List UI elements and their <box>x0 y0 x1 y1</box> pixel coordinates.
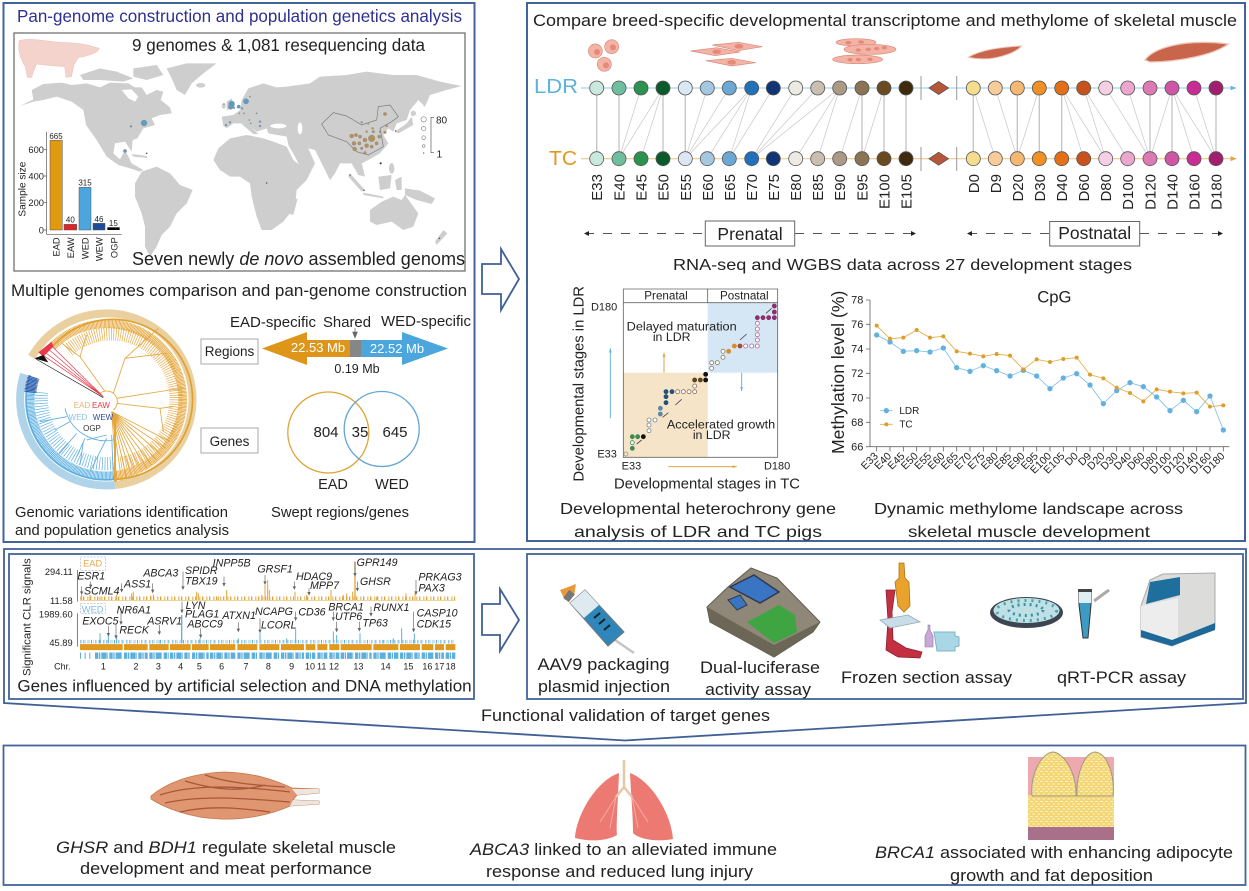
adipose conclusion: BRCA1 associated with enhancing adipocyte <box>875 844 1233 862</box>
arrow: to validation <box>482 589 519 651</box>
icon: myoblast cells <box>588 39 896 71</box>
subheading: multiple genomes: Multiple genomes comparison and pan-genome construction <box>11 282 467 300</box>
gene pointer arrows <box>80 562 418 639</box>
stage correspondence lines <box>597 88 1216 159</box>
heterochrony chart: Accelerated growth <box>667 417 775 431</box>
track axes: Significant CLR signals <box>22 558 34 676</box>
stage labels: E95 <box>854 174 872 201</box>
tree group labels: EAD <box>74 401 90 410</box>
stage labels: D120 <box>1142 174 1160 210</box>
track axes: 11.58 <box>50 596 73 606</box>
icon: petri dish <box>990 597 1063 628</box>
methylation line chart: E65 <box>939 450 961 472</box>
stage labels: D30 <box>1032 174 1049 202</box>
methylation line chart: 66 <box>851 441 863 453</box>
methylation line chart: E80 <box>979 450 1001 472</box>
methylation line chart: E75 <box>966 450 987 472</box>
China outline <box>322 105 398 155</box>
heterochrony chart: Developmental stages in TC <box>614 476 800 492</box>
arrow: to transcriptome <box>482 249 519 310</box>
heterochrony chart: D180 <box>764 460 790 472</box>
stage labels: E40 <box>612 174 628 201</box>
gene labels: RUNX1 <box>373 602 410 614</box>
icon: muscle tissue <box>968 42 1228 62</box>
methylation line chart: D9 <box>1076 450 1094 468</box>
heterochrony chart: Prenatal <box>644 289 688 302</box>
stage labels: D0 <box>966 174 983 193</box>
gene labels: HDAC9 <box>296 571 332 583</box>
regions labels: EAD-specific <box>230 315 316 331</box>
stage labels: D60 <box>1076 174 1093 202</box>
sample size bar chart: WED <box>80 237 90 259</box>
track axes: 1989.60 <box>39 609 73 619</box>
methylation line chart: E40 <box>872 450 894 472</box>
gene labels: INPP5B <box>213 558 251 570</box>
stage labels: E60 <box>700 174 717 201</box>
muscle conclusion: development and meat performance <box>80 860 372 878</box>
panel heading: pan-genome: Pan-genome construction and population genetics analysis <box>17 6 462 26</box>
stage labels: E70 <box>744 174 761 201</box>
stage labels: E50 <box>656 174 672 201</box>
track axes <box>22 557 105 676</box>
stage labels: D180 <box>1208 174 1226 210</box>
venn diagram: EAD <box>318 477 348 493</box>
tree group labels <box>69 401 114 433</box>
chart legend <box>880 406 919 431</box>
methylation line chart: CpG <box>1037 288 1071 307</box>
sample size bar chart: EAW <box>66 237 76 258</box>
tree caption <box>15 505 229 539</box>
genes box <box>201 428 258 453</box>
chromosome labels: 16 <box>422 661 432 671</box>
tree group labels: OGP <box>83 424 101 433</box>
sample size bar chart: 315 <box>78 178 92 187</box>
sample size bar chart: 46 <box>95 215 104 224</box>
lung conclusion <box>469 841 777 881</box>
gene labels: ASRV1 <box>146 615 182 627</box>
tree caption: and population genetics analysis <box>15 523 229 539</box>
gene labels: CD36 <box>298 607 326 619</box>
gene labels: EXOC5 <box>82 615 119 627</box>
phylogenetic tree <box>20 313 193 485</box>
chromosome labels: 13 <box>353 661 363 671</box>
muscle conclusion: GHSR and BDH1 regulate skeletal muscle <box>56 839 396 857</box>
gene labels: SCML4 <box>84 585 120 597</box>
sample size bar chart: 665 <box>49 132 63 141</box>
methylation line chart: D160 <box>1188 450 1214 477</box>
gene labels: CASP10 <box>417 607 458 619</box>
panel heading: transcriptome: Compare breed-specific developmental transcriptome and methylome of skeletal muscle <box>533 12 1237 30</box>
gene labels: GHSR <box>360 576 391 588</box>
chromosome labels: Chr. <box>54 661 71 671</box>
panel: conclusions <box>4 746 1246 885</box>
heterochrony caption <box>560 501 836 541</box>
heterochrony chart: in LDR <box>653 330 691 344</box>
stage labels: E105 <box>898 174 916 209</box>
sample size bar chart: 40 <box>66 216 75 225</box>
methylation line chart: D0 <box>1063 450 1081 468</box>
tree group labels: WEW <box>93 413 114 422</box>
methylation line chart: D80 <box>1138 450 1161 473</box>
methylation line chart: D40 <box>1112 450 1134 473</box>
gene labels: PLAG1 <box>185 609 219 621</box>
gene labels: NR6A1 <box>117 604 151 616</box>
gene labels: ABCC9 <box>186 619 223 631</box>
sample size bar chart: 200 <box>28 198 44 208</box>
stage labels: D40 <box>1054 174 1071 202</box>
muscle conclusion <box>56 839 396 878</box>
methylation line chart: D100 <box>1148 450 1174 477</box>
regions labels <box>230 314 471 331</box>
regions labels: Shared <box>323 315 371 331</box>
regions arrows: 22.53 Mb <box>291 340 345 355</box>
venn diagram: WED <box>375 477 409 493</box>
chromosome labels: 18 <box>446 661 456 671</box>
gene labels: PAX3 <box>418 583 445 595</box>
track axes: 45.89 <box>49 638 73 648</box>
adipose conclusion <box>875 844 1233 885</box>
point size legend: 80 <box>436 115 448 126</box>
gene labels <box>77 557 462 636</box>
venn diagram: 804 <box>313 424 339 441</box>
heterochrony caption: analysis of LDR and TC pigs <box>574 524 822 541</box>
stage labels: E45 <box>634 174 650 201</box>
swept regions diagram <box>201 314 471 521</box>
track axes: 294.11 <box>45 567 73 577</box>
methylation line chart: E50 <box>899 450 921 472</box>
methylation line chart: E45 <box>886 450 908 472</box>
icon: adipose tissue <box>1028 752 1114 840</box>
gene labels: GRSF1 <box>257 563 293 575</box>
timeline axes <box>581 76 1236 171</box>
point size legend <box>421 115 448 161</box>
gene labels: PRKAG3 <box>418 572 462 584</box>
LDR stage circles <box>590 81 1223 95</box>
chart legend: TC <box>899 420 913 431</box>
assay labels: Dual-luciferase <box>700 659 820 677</box>
methylation line chart: 68 <box>851 417 863 429</box>
heterochrony chart: Delayed maturation <box>627 320 737 334</box>
gene labels: CDK15 <box>417 619 451 631</box>
methylome caption <box>874 501 1183 541</box>
chromosome labels: 1 <box>101 661 106 671</box>
swept caption: Swept regions/genes <box>271 505 409 521</box>
chromosome labels: 8 <box>266 661 271 671</box>
gene labels: NCAPG <box>255 606 293 618</box>
panel: genes under selection <box>9 554 474 699</box>
gene labels: TP63 <box>362 617 388 629</box>
venn diagram <box>288 392 419 493</box>
sample size bar chart: Sample size <box>18 162 29 217</box>
methylation line chart: D20 <box>1085 450 1107 473</box>
methylation line chart: E100 <box>1028 450 1054 476</box>
stage labels: E100 <box>876 174 894 209</box>
lung conclusion: ABCA3 linked to an alleviated immune <box>469 841 777 859</box>
methylation line chart: D140 <box>1174 450 1201 477</box>
chart legend: LDR <box>899 406 919 417</box>
point size legend: 1 <box>437 150 443 161</box>
venn diagram: 645 <box>382 424 408 441</box>
stage labels: D20 <box>1010 174 1027 202</box>
gene labels: TBX19 <box>185 575 218 587</box>
map box <box>14 33 465 271</box>
icon: qPCR machine <box>1141 573 1215 646</box>
gene labels: ABCA3 <box>142 568 178 580</box>
gene labels: ASS1 <box>123 578 151 590</box>
icon: PCR tube <box>1078 589 1109 638</box>
venn diagram: 35 <box>352 424 368 441</box>
staircase points <box>624 304 776 456</box>
chromosome labels: 12 <box>329 661 339 671</box>
heterochrony chart: D180 <box>591 302 617 314</box>
gene labels: ESR1 <box>77 570 105 582</box>
methylation line chart: Methylation level (%) <box>828 291 848 454</box>
map title: 9 genomes & 1,081 resequencing data <box>132 35 425 55</box>
heterochrony caption: Developmental heterochrony gene <box>560 501 836 518</box>
track axes: WED <box>82 604 104 614</box>
sample size bar chart: EAD <box>51 237 61 257</box>
methylation line chart: D120 <box>1161 450 1187 477</box>
methylation line chart: E60 <box>926 450 947 472</box>
regions arrows: 0.19 Mb <box>334 362 380 376</box>
chromosome labels: 2 <box>133 661 138 671</box>
LDR row label: LDR <box>534 76 578 98</box>
sample size bar chart: WEW <box>95 237 105 261</box>
validation chevron frame <box>4 549 1246 740</box>
assay labels: plasmid injection <box>538 678 670 696</box>
regions box <box>201 339 258 364</box>
chromosome labels: 17 <box>434 661 444 671</box>
TC row label: TC <box>549 148 577 170</box>
gene labels: MPP7 <box>310 580 340 592</box>
gene labels: LYN <box>186 600 206 612</box>
chromosome labels: 6 <box>219 661 224 671</box>
chromosome labels: 9 <box>289 661 294 671</box>
methylation line chart: 72 <box>851 368 863 380</box>
sample size bar chart: 15 <box>109 219 118 228</box>
methylation line chart: E105 <box>1041 450 1068 476</box>
stage labels: E65 <box>722 174 739 201</box>
heterochrony chart <box>571 286 800 492</box>
heterochrony chart: in LDR <box>693 428 731 442</box>
methylation line chart <box>828 288 1229 477</box>
chromosome labels: 14 <box>381 661 391 671</box>
methylation line chart: E95 <box>1019 450 1041 472</box>
assay labels <box>538 656 1187 699</box>
methylation line chart: 76 <box>851 319 863 331</box>
gene labels: ATXN1 <box>221 610 256 622</box>
stage labels: E90 <box>832 174 849 201</box>
icon: syringe <box>560 584 634 653</box>
stage labels: E80 <box>788 174 805 201</box>
chromosome labels: 3 <box>156 661 161 671</box>
methylome caption: Dynamic methylome landscape across <box>874 501 1183 518</box>
stage labels: E33 <box>589 174 606 201</box>
gene labels: RECK <box>119 624 150 636</box>
panel: pan-genome construction <box>4 3 474 542</box>
stage labels: D9 <box>988 174 1005 193</box>
stage labels: E85 <box>810 174 827 201</box>
postnatal range: Postnatal <box>1058 223 1131 243</box>
stage labels <box>589 174 1226 210</box>
methylation line chart: E33 <box>859 450 881 472</box>
prenatal range <box>584 221 916 246</box>
tree group labels: EAW <box>92 401 110 410</box>
icon: microscope <box>880 563 959 658</box>
icon: muscle <box>151 772 319 819</box>
sample size bar chart: OGP <box>109 237 119 258</box>
methylation line chart: E70 <box>952 450 974 472</box>
selection signal tracks <box>80 562 455 656</box>
chromosome labels: 11 <box>317 661 326 671</box>
icon: luminometer <box>707 568 820 657</box>
chromosome labels: 7 <box>243 661 248 671</box>
tree group labels: WED <box>69 413 88 422</box>
regions box: Regions <box>205 344 255 359</box>
regions arrows <box>262 328 448 376</box>
assay labels: activity assay <box>705 681 812 699</box>
heterochrony chart: E33 <box>597 449 617 461</box>
validation heading: Functional validation of target genes <box>481 707 770 725</box>
gene labels: GPR149 <box>357 557 398 569</box>
methylation line chart: 78 <box>851 295 863 307</box>
assay labels: Frozen section assay <box>841 669 1013 687</box>
adipose conclusion: growth and fat deposition <box>950 867 1153 885</box>
gene labels: SPIDR <box>185 565 218 577</box>
panel: functional assays <box>527 554 1243 699</box>
sample size bar chart: 0 <box>39 225 44 235</box>
sample size bar chart: 400 <box>28 171 44 181</box>
stage labels: D80 <box>1098 174 1115 202</box>
methylation line chart: E85 <box>992 450 1014 472</box>
methylation line chart: E90 <box>1006 450 1027 472</box>
methylome caption: skeletal muscle development <box>908 524 1151 541</box>
panel: developmental transcriptome <box>527 3 1245 541</box>
chromosome labels: 4 <box>178 661 183 671</box>
heterochrony chart: E33 <box>622 460 641 472</box>
sample size bar chart <box>18 132 122 261</box>
TC stage circles <box>590 152 1223 166</box>
lung conclusion: response and reduced lung injury <box>486 863 754 881</box>
icon: lungs <box>575 760 673 840</box>
regions arrows: 22.52 Mb <box>370 341 424 356</box>
methylation line chart: D30 <box>1098 450 1121 473</box>
gene labels: LCORL <box>261 619 297 631</box>
stage labels: D100 <box>1120 174 1137 210</box>
map caption: Seven newly de novo assembled genoms <box>132 248 465 269</box>
chromosome labels: 5 <box>197 661 202 671</box>
genes box: Genes <box>210 434 250 449</box>
stage labels: E55 <box>678 174 695 201</box>
chromosome labels: 15 <box>403 661 413 671</box>
postnatal range <box>967 222 1223 246</box>
regions labels: WED-specific <box>381 314 471 330</box>
tree caption: Genomic variations identification <box>15 505 228 521</box>
stage labels: E75 <box>766 174 783 201</box>
chromosome labels: 10 <box>305 661 315 671</box>
world map <box>20 63 462 257</box>
stage labels: D160 <box>1186 174 1204 210</box>
prenatal range: Prenatal <box>717 224 783 244</box>
gene labels: UTP6 <box>335 611 362 623</box>
methylation line chart: D180 <box>1201 450 1227 477</box>
sample size bar chart: 600 <box>28 145 44 155</box>
chromosome labels <box>54 661 456 671</box>
methylation line chart: E55 <box>912 450 934 472</box>
assay labels: qRT-PCR assay <box>1057 669 1187 687</box>
stage labels: D140 <box>1164 174 1182 210</box>
track axes: EAD <box>83 559 103 569</box>
icon: pig <box>19 39 99 77</box>
sample points <box>123 96 440 239</box>
methylation line chart: 74 <box>851 344 863 356</box>
heterochrony chart: Postnatal <box>720 289 769 302</box>
methylation line chart: D60 <box>1125 450 1147 473</box>
data note: RNA-seq and WGBS data across 27 development stages <box>673 257 1132 274</box>
gene labels: BRCA1 <box>328 602 364 614</box>
heterochrony chart: Developmental stages in LDR <box>571 286 587 482</box>
methylation line chart: 70 <box>851 393 863 405</box>
genes panel caption: Genes influenced by artificial selection and DNA methylation <box>17 677 472 696</box>
assay labels: AAV9 packaging <box>538 656 670 674</box>
